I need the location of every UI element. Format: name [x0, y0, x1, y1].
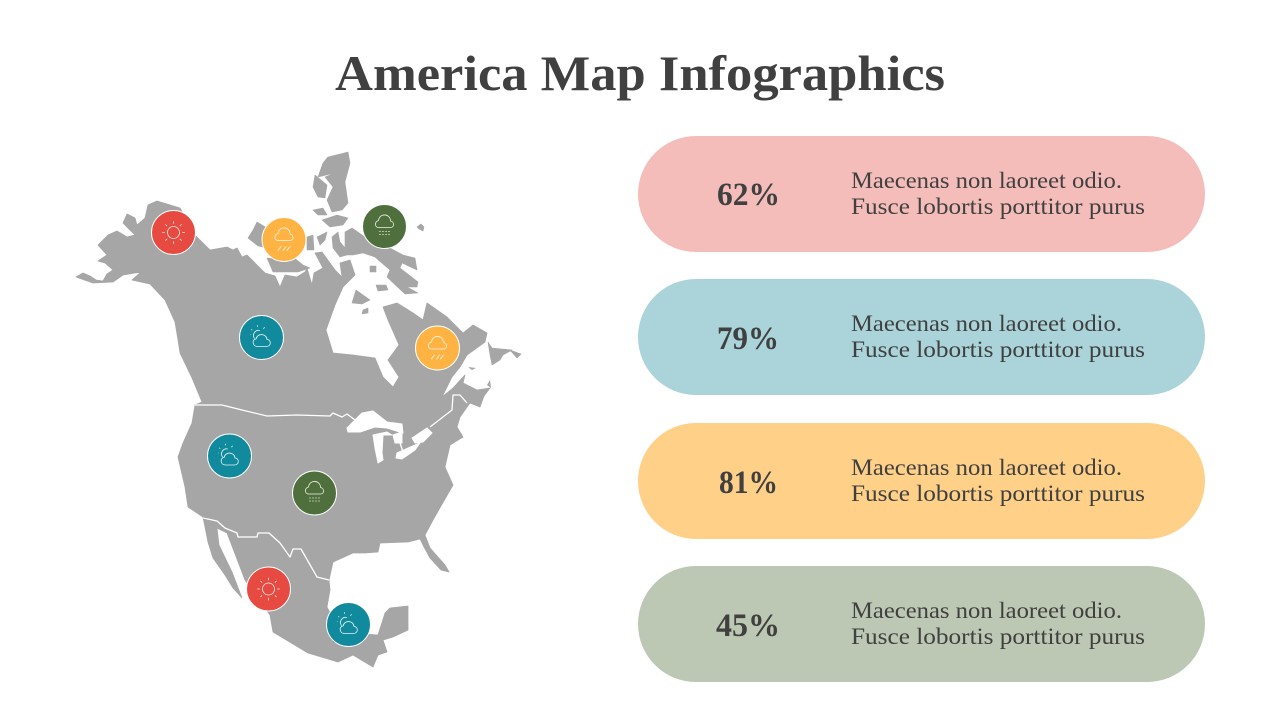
description — [851, 168, 1145, 219]
marker: rain, Quebec — [416, 326, 460, 370]
description: Fusce lobortis porttitor purus — [851, 337, 1145, 362]
description — [851, 455, 1145, 506]
description: Maecenas non laoreet odio. — [851, 311, 1122, 336]
marker: snow, Arctic — [362, 204, 406, 248]
value: 62%: 62% — [717, 177, 780, 213]
description: Maecenas non laoreet odio. — [851, 455, 1122, 480]
panel: 79% — [638, 279, 1205, 395]
marker: sun, Mexico — [246, 567, 290, 611]
description: Maecenas non laoreet odio. — [851, 168, 1122, 193]
panel: 81% — [638, 423, 1205, 539]
marker: snow, central US — [292, 471, 336, 515]
value: 81%: 81% — [719, 465, 778, 501]
description: Fusce lobortis porttitor purus — [851, 624, 1145, 649]
marker: partly cloudy, central Canada — [240, 316, 284, 360]
panel: 62% — [638, 136, 1205, 252]
mainland silhouette — [76, 201, 490, 667]
panel: 45% — [638, 566, 1205, 682]
marker: partly cloudy, western US — [208, 434, 252, 478]
description: Maecenas non laoreet odio. — [851, 598, 1122, 623]
value: 45%: 45% — [716, 608, 780, 644]
marker: rain, northern Canada — [262, 218, 306, 262]
borders — [195, 395, 467, 580]
description — [851, 598, 1145, 649]
Great Lakes — [347, 411, 432, 463]
arctic islands and Newfoundland — [248, 152, 521, 365]
title: America Map Infographics — [335, 45, 945, 101]
Nova Scotia and Anticosti — [468, 367, 491, 388]
description — [851, 311, 1145, 362]
description: Fusce lobortis porttitor purus — [851, 481, 1145, 506]
map: North America — [76, 152, 521, 667]
description: Fusce lobortis porttitor purus — [851, 194, 1145, 219]
marker: sun, Alaska — [152, 210, 196, 254]
marker: partly cloudy, southern Mexico — [326, 602, 370, 646]
value: 79%: 79% — [717, 321, 779, 357]
